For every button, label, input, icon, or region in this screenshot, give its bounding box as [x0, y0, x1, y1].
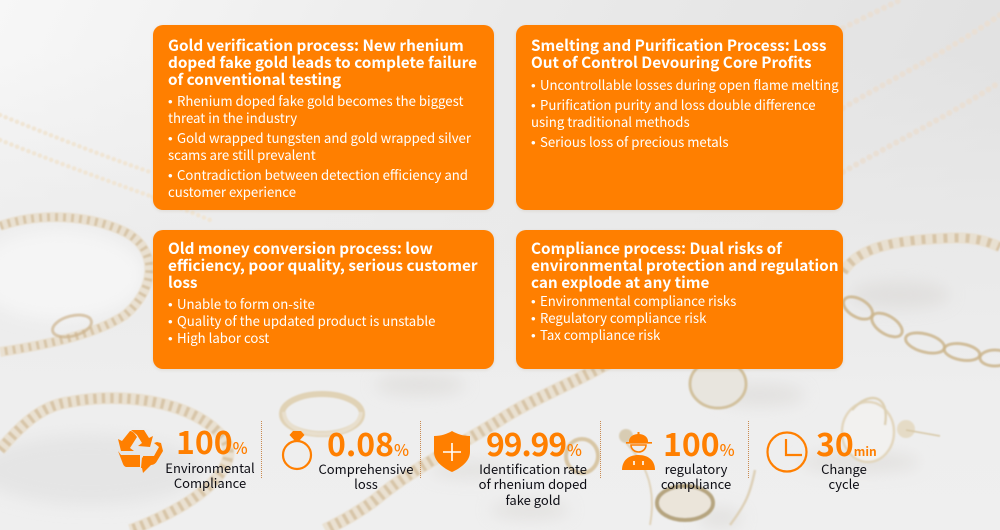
label: compliance — [661, 474, 731, 493]
bullets: smelting: • — [531, 98, 536, 113]
icon: shield with plus — [434, 431, 470, 472]
label — [165, 458, 255, 492]
ring — [282, 394, 362, 434]
bullets: old money: • — [168, 297, 173, 312]
label: Compliance — [174, 473, 246, 492]
label: of rhenium doped — [479, 474, 587, 493]
heading: old money: Old money conversion process: low — [168, 237, 433, 259]
label — [318, 459, 413, 493]
bullets: smelting: Purification purity and loss double difference — [540, 95, 816, 114]
label — [661, 459, 731, 493]
heading: compliance: can explode at any time — [531, 271, 709, 293]
bullets: gold verification: • — [168, 168, 173, 183]
heading: compliance: Compliance process: Dual risks of — [531, 237, 782, 259]
heading: gold verification: doped fake gold leads to complete failure — [168, 51, 477, 73]
bullets: smelting: using traditional methods — [531, 112, 690, 131]
label: regulatory — [665, 459, 727, 478]
stat: regulatory compliance — [622, 420, 735, 493]
bullets: smelting: Uncontrollable losses during open flame melting — [540, 75, 839, 94]
bullets: compliance: • — [531, 294, 536, 309]
label — [821, 459, 867, 493]
bullets: compliance: Environmental compliance risks — [540, 291, 736, 310]
icon: worker with hard hat — [622, 432, 655, 470]
bullets: old money: High labor cost — [177, 328, 269, 347]
bullets: smelting — [531, 75, 839, 151]
heading: old money: efficiency, poor quality, serious customer — [168, 254, 478, 276]
bullets: old money — [168, 294, 435, 347]
panel: smelting and purification — [516, 25, 843, 210]
bullets: smelting: • — [531, 78, 536, 93]
brooch — [690, 360, 746, 408]
bullets: gold verification: threat in the industry — [168, 108, 297, 127]
bullets: compliance: • — [531, 311, 536, 326]
bullets: compliance — [531, 291, 736, 344]
bullets: gold verification: • — [168, 131, 173, 146]
stat: identification rate — [434, 420, 587, 509]
stat: comprehensive loss — [282, 420, 413, 493]
label: Identification rate — [479, 459, 587, 478]
bullets: gold verification — [168, 91, 471, 201]
panel: old money conversion — [153, 230, 494, 369]
heading: smelting: Out of Control Devouring Core Profits — [531, 51, 812, 73]
bullets: gold verification: scams are still prevalent — [168, 145, 316, 164]
value: 30min — [816, 420, 877, 466]
divider — [261, 421, 262, 478]
bullets: old money: • — [168, 331, 173, 346]
label: Environmental — [165, 458, 255, 477]
value: 0.08% — [327, 420, 409, 466]
bullets: compliance: Tax compliance risk — [540, 325, 660, 344]
bullets: old money: Quality of the updated product is unstable — [177, 311, 435, 330]
divider — [600, 421, 601, 478]
bullets: smelting: Serious loss of precious metals — [540, 132, 729, 151]
curb chains: base — [0, 217, 1000, 530]
stat: environmental compliance — [118, 418, 255, 492]
panel: gold verification process — [153, 25, 494, 210]
heading: old money — [168, 237, 478, 293]
heading: smelting — [531, 34, 826, 73]
heading: gold verification: Gold verification process: New rhenium — [168, 34, 464, 56]
curb chains: links — [0, 217, 1000, 530]
icon: recycle — [118, 430, 163, 473]
beaded chains — [0, 115, 215, 222]
value: 99.99% — [486, 420, 582, 466]
panel: compliance — [516, 230, 843, 369]
bullets: gold verification: Gold wrapped tungsten and gold wrapped silver — [177, 128, 471, 147]
divider — [748, 421, 749, 478]
label: Change — [821, 459, 867, 478]
label: loss — [354, 474, 378, 493]
value: 100% — [176, 418, 248, 464]
bullets: compliance: Regulatory compliance risk — [540, 308, 706, 327]
label — [479, 459, 587, 509]
heading: compliance — [531, 237, 838, 293]
stat: change cycle — [766, 420, 877, 493]
bullets: old money: Unable to form on-site — [177, 294, 315, 313]
icon: clock — [766, 431, 808, 473]
divider — [420, 421, 421, 478]
label: Comprehensive — [318, 459, 413, 478]
heading: smelting: Smelting and Purification Process: Loss — [531, 34, 826, 56]
bullets: gold verification: Rhenium doped fake gold becomes the biggest — [177, 91, 463, 110]
heading: old money: loss — [168, 271, 197, 293]
oval link chain — [840, 292, 1000, 366]
value: 100% — [663, 420, 735, 466]
label: fake gold — [505, 490, 561, 509]
bullets: gold verification: Contradiction between detection efficiency and — [177, 165, 468, 184]
icon: ring — [282, 431, 312, 470]
bullets: gold verification: customer experience — [168, 182, 296, 201]
heading: gold verification: of conventional testing — [168, 68, 341, 90]
earrings — [842, 402, 894, 462]
label: cycle — [829, 474, 859, 493]
heading: gold verification — [168, 34, 477, 90]
bullets: smelting: • — [531, 135, 536, 150]
heading: compliance: environmental protection and regulation — [531, 254, 838, 276]
bullets: gold verification: • — [168, 94, 173, 109]
bullets: compliance: • — [531, 328, 536, 343]
bullets: old money: • — [168, 314, 173, 329]
